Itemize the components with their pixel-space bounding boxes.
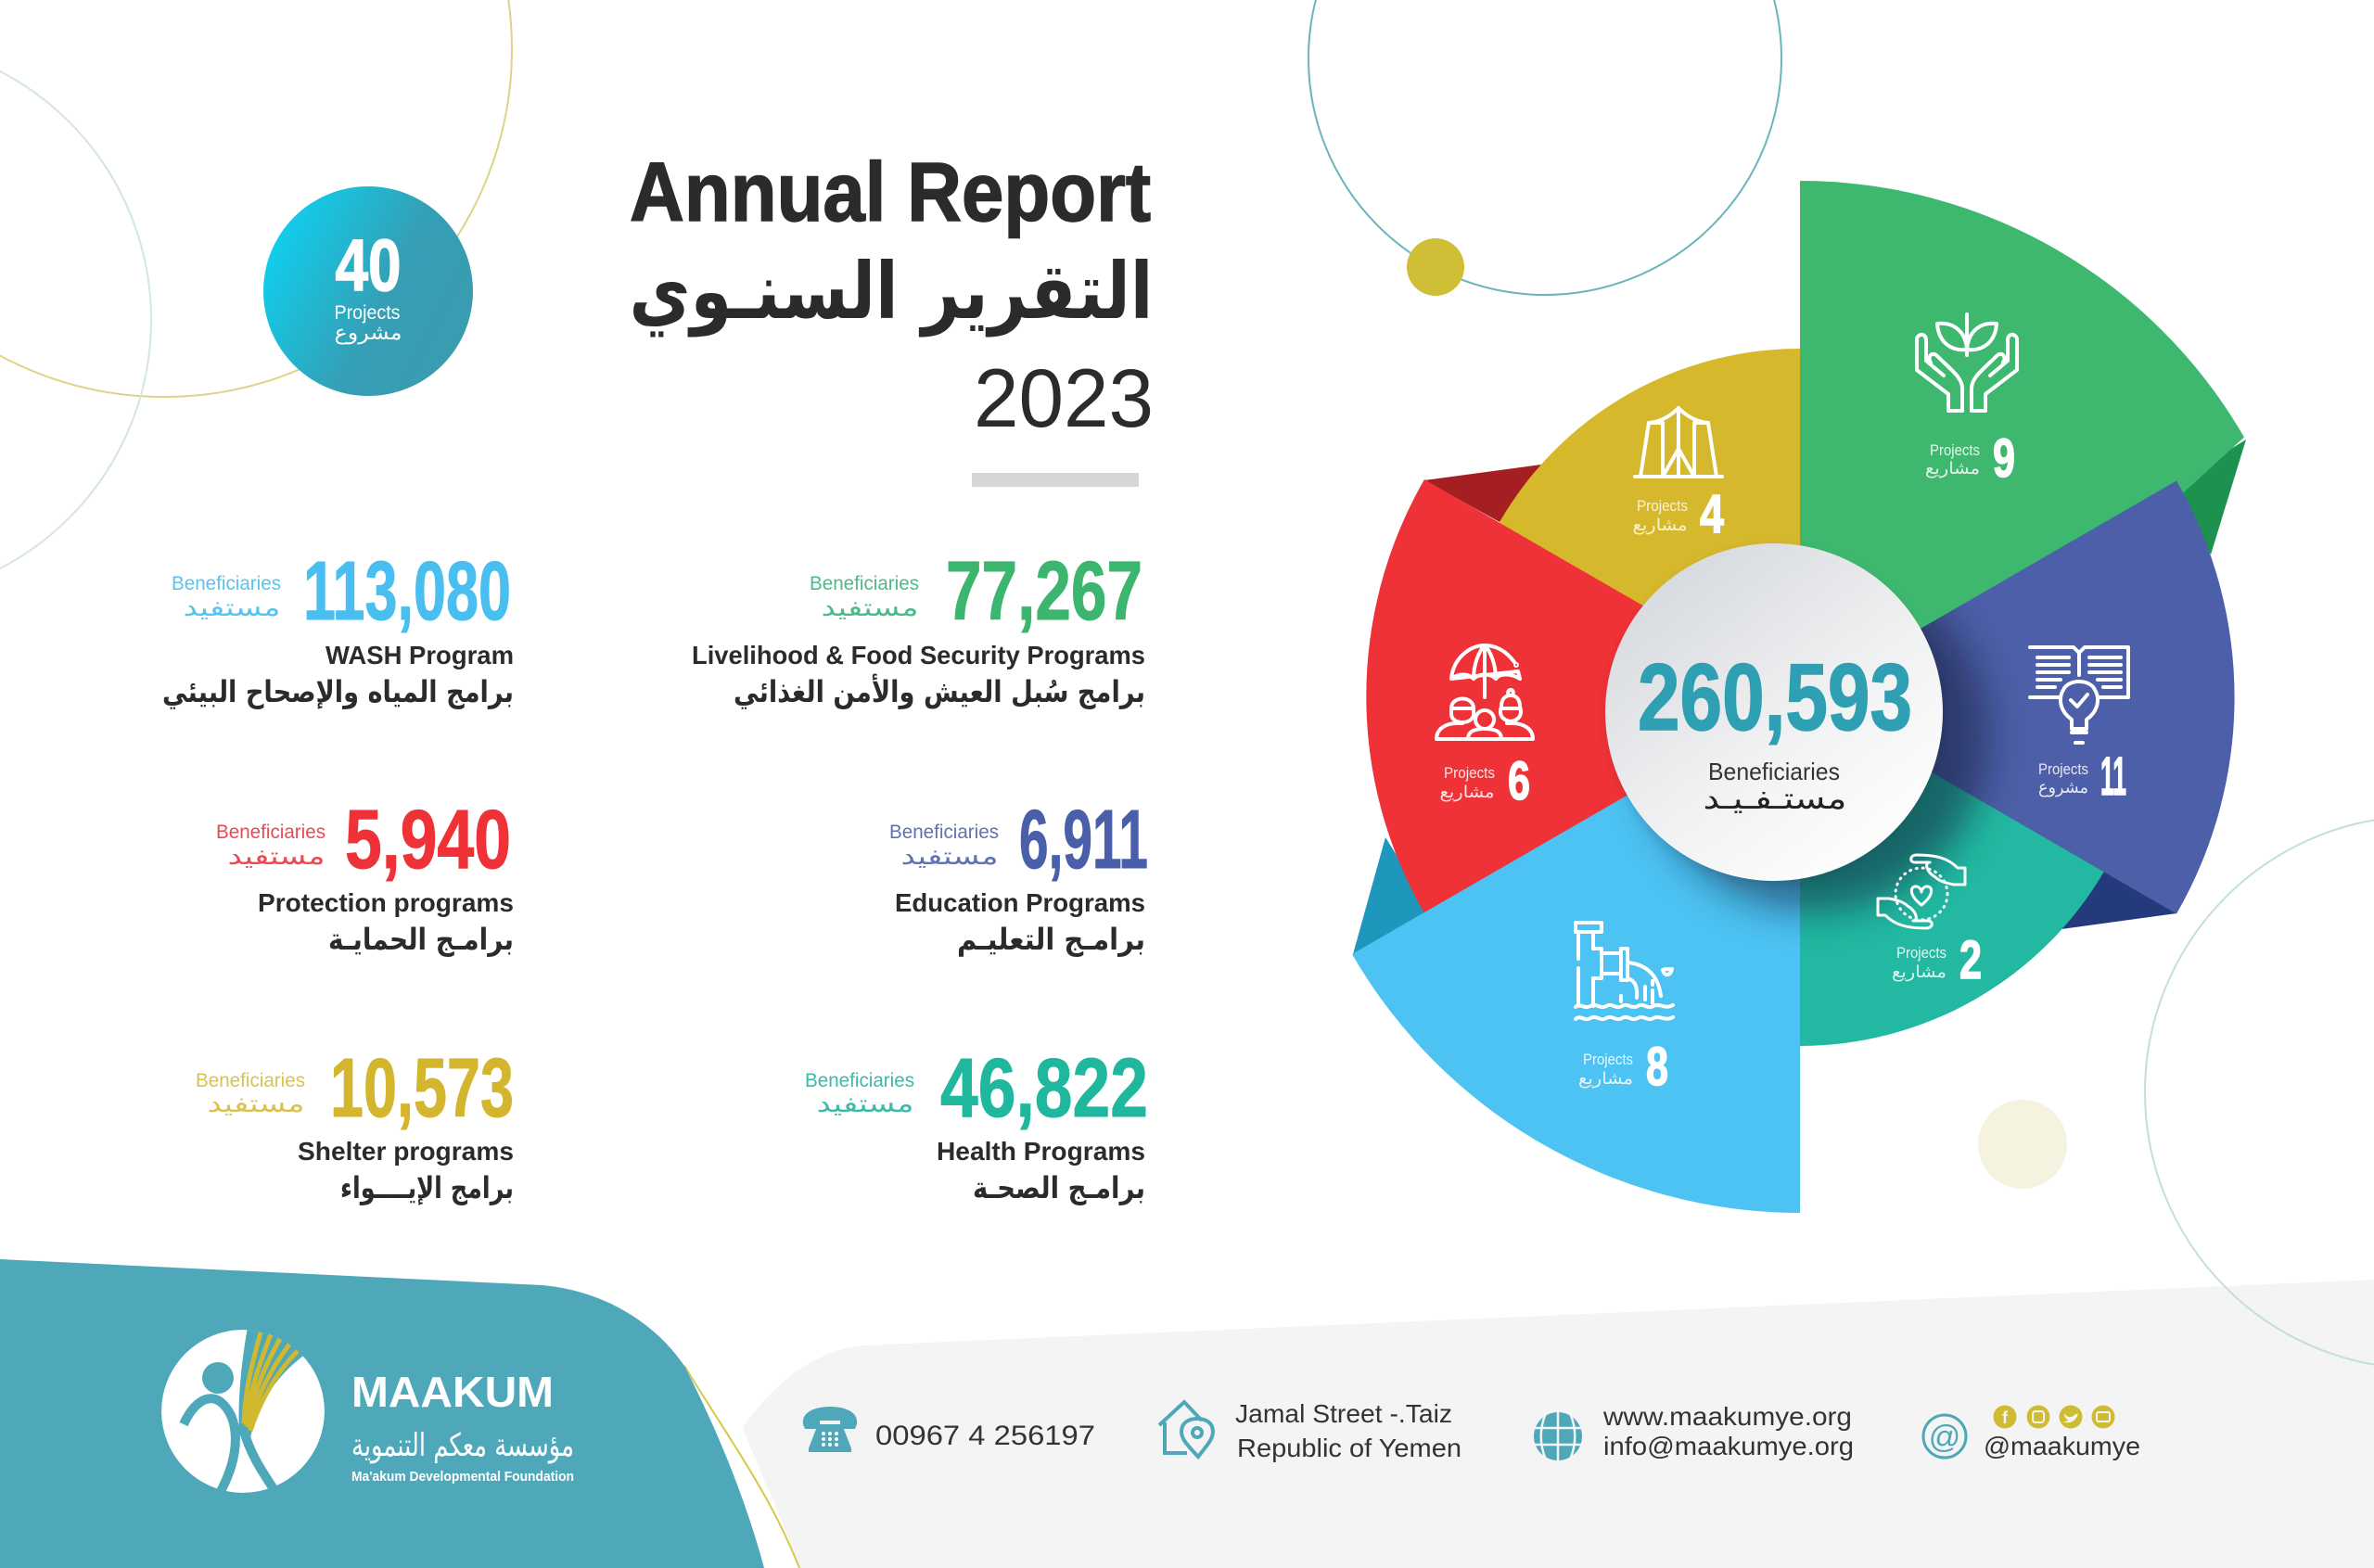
- contact row: [803, 1399, 2140, 1462]
- icon: globe: [1534, 1411, 1582, 1460]
- segment: red labels: 6: [1508, 751, 1530, 811]
- stat: Education: برامـج التعليـم: [957, 922, 1145, 957]
- fold: dark blue: [1353, 837, 1433, 954]
- title: year: 2023: [974, 351, 1154, 444]
- icon: hands and plant: [1917, 314, 2017, 411]
- segment: navy labels: [2038, 746, 2126, 807]
- logo tagline: Ma'akum Developmental Foundation: [351, 1469, 574, 1485]
- center circle soft shadow: [1605, 546, 1943, 884]
- decorative dot: cream: [1978, 1100, 2067, 1189]
- total projects badge: [263, 186, 473, 396]
- stat: Livelihood: برامج سُبل العيش والأمن الغذائي: [734, 673, 1145, 709]
- stat: WASH: برامج المياه والإصحاح البيئي: [162, 674, 514, 709]
- sector: shelter yellow: [1500, 349, 1800, 714]
- sector: health teal: [1800, 694, 2105, 1046]
- footer band: grey: [743, 1280, 2374, 1568]
- stat: Education: Beneficiaries: [889, 822, 999, 843]
- stat: Education: 6,911: [1019, 794, 1148, 886]
- stat: Health: Beneficiaries: [805, 1070, 914, 1091]
- email: info@maakumye.org: [1603, 1432, 1854, 1460]
- badge number: 40: [336, 223, 401, 306]
- pie chart: [1352, 181, 2246, 1213]
- segment: teal labels: مشاريع: [1892, 962, 1946, 982]
- stat: Protection: Protection programs: [258, 888, 514, 917]
- segment: teal labels: Projects: [1896, 944, 1946, 962]
- stat: Shelter: Beneficiaries: [196, 1070, 305, 1091]
- center label Arabic: مستـفـيـد: [1703, 781, 1847, 816]
- decorative circle: yellow top left: [0, 0, 512, 397]
- center circle: [1605, 543, 1943, 881]
- stat: WASH: مستفيد: [184, 594, 280, 622]
- segment: blue labels: Projects: [1583, 1051, 1633, 1068]
- segment: green labels: [1925, 428, 2015, 489]
- fold: dark navy: [2061, 867, 2176, 929]
- segment: blue labels: [1578, 1037, 1668, 1097]
- address line 1: Jamal Street -.Taiz: [1235, 1399, 1452, 1428]
- stat: Protection: مستفيد: [228, 843, 325, 871]
- stat: Protection: [216, 794, 514, 957]
- logo Arabic name: مؤسسة معكم التنموية: [351, 1427, 574, 1464]
- icon: at sign: [1923, 1415, 1966, 1458]
- stat: Health: [805, 1042, 1148, 1205]
- fold: dark green: [2170, 440, 2246, 555]
- segment: yellow labels: 4: [1700, 484, 1724, 544]
- footer line: yellow: [684, 1366, 799, 1568]
- icon: phone: [803, 1407, 857, 1452]
- stat: Health: مستفيد: [816, 1090, 914, 1118]
- sector: protection red: [1366, 479, 1800, 913]
- icon: tent: [1635, 408, 1722, 477]
- sector: livelihood green: [1800, 181, 2244, 733]
- badge label: Projects: [334, 302, 401, 324]
- title divider: [972, 473, 1139, 487]
- segment: red labels: [1439, 751, 1530, 811]
- icon: house pin: [1159, 1402, 1213, 1457]
- segment: teal labels: [1892, 930, 1982, 990]
- segment: green labels: مشاريع: [1925, 459, 1980, 478]
- stat: Livelihood: Beneficiaries: [810, 573, 919, 594]
- segment: red labels: Projects: [1444, 764, 1495, 782]
- stat: Shelter: Shelter programs: [298, 1137, 514, 1166]
- stat: Livelihood: مستفيد: [822, 594, 918, 622]
- stat: Health: 46,822: [940, 1042, 1148, 1135]
- segment: yellow labels: [1632, 484, 1724, 544]
- stat: Education: Education Programs: [895, 888, 1145, 917]
- sector: WASH blue: [1352, 695, 1800, 1213]
- badge label Arabic: مشروع: [334, 322, 402, 345]
- stat: Livelihood: 77,267: [946, 545, 1142, 638]
- stat: Protection: Beneficiaries: [216, 822, 325, 843]
- segment: yellow labels: Projects: [1637, 497, 1688, 515]
- icon: caring hands and heart: [1878, 855, 1965, 928]
- segment: green labels: Projects: [1930, 441, 1980, 459]
- segment: red labels: مشاريع: [1439, 783, 1495, 802]
- title: Arabic: التقرير السنـوي: [629, 246, 1154, 338]
- segment: navy labels: مشروع: [2038, 778, 2088, 797]
- logo mark: [161, 1321, 325, 1495]
- website: www.maakumye.org: [1602, 1402, 1852, 1431]
- stat: Shelter: [196, 1042, 514, 1205]
- icon: umbrella and family: [1436, 645, 1533, 739]
- fold: dark red: [1424, 465, 1541, 522]
- decorative dot: olive: [1407, 238, 1464, 296]
- stat: Health: Health Programs: [937, 1137, 1145, 1166]
- stat: WASH: 113,080: [303, 545, 511, 638]
- address line 2: Republic of Yemen: [1237, 1434, 1461, 1462]
- stat: Education: [889, 794, 1148, 957]
- stat: Protection: برامـج الحمايـة: [328, 922, 514, 957]
- sector: education navy: [1802, 480, 2235, 914]
- stat: Shelter: برامج الإيــــواء: [340, 1170, 514, 1205]
- footer panel: teal: [0, 1259, 764, 1568]
- stat: WASH: Beneficiaries: [172, 573, 281, 594]
- social icons: f: [2002, 1409, 2009, 1427]
- stat: Livelihood: Livelihood & Food Security Programs: [692, 641, 1145, 669]
- segment: yellow labels: مشاريع: [1632, 516, 1688, 535]
- title block: [629, 147, 1154, 444]
- decorative circle: pale teal left: [0, 40, 151, 600]
- center total: 260,593: [1638, 644, 1912, 750]
- segment: green labels: 9: [1993, 428, 2015, 489]
- stat: Education: مستفيد: [901, 843, 998, 871]
- icon: at sign: @: [1929, 1420, 1960, 1455]
- stat: Protection: 5,940: [345, 794, 511, 886]
- phone number: 00967 4 256197: [875, 1421, 1095, 1451]
- logo: [161, 1321, 574, 1495]
- stat: WASH: [162, 545, 514, 709]
- pie chart: 11: [2100, 746, 2126, 807]
- segment: teal labels: 2: [1959, 930, 1982, 990]
- stat: Livelihood: [692, 545, 1145, 709]
- icon: wastewater pipe: [1576, 923, 1673, 1019]
- segment: blue labels: 8: [1646, 1037, 1668, 1097]
- center label: Beneficiaries: [1708, 758, 1840, 785]
- logo wordmark: MAAKUM: [351, 1368, 554, 1416]
- decorative circle: teal top right: [1308, 0, 1781, 295]
- circle cast shadow: [1639, 563, 1987, 911]
- decorative circle: bottom right: [2145, 816, 2374, 1369]
- title: Annual Report: Annual Report: [630, 147, 1151, 239]
- segment: blue labels: مشاريع: [1578, 1069, 1633, 1089]
- segment: navy labels: Projects: [2038, 760, 2088, 778]
- social handle: @maakumye: [1984, 1432, 2140, 1460]
- social icons: [1994, 1406, 2114, 1428]
- stat: WASH: WASH Program: [325, 641, 514, 669]
- stat: Shelter: 10,573: [330, 1042, 514, 1135]
- stat: Shelter: مستفيد: [208, 1090, 304, 1118]
- stat: Health: برامـج الصحـة: [973, 1170, 1145, 1205]
- icon: book and bulb: [2030, 647, 2128, 743]
